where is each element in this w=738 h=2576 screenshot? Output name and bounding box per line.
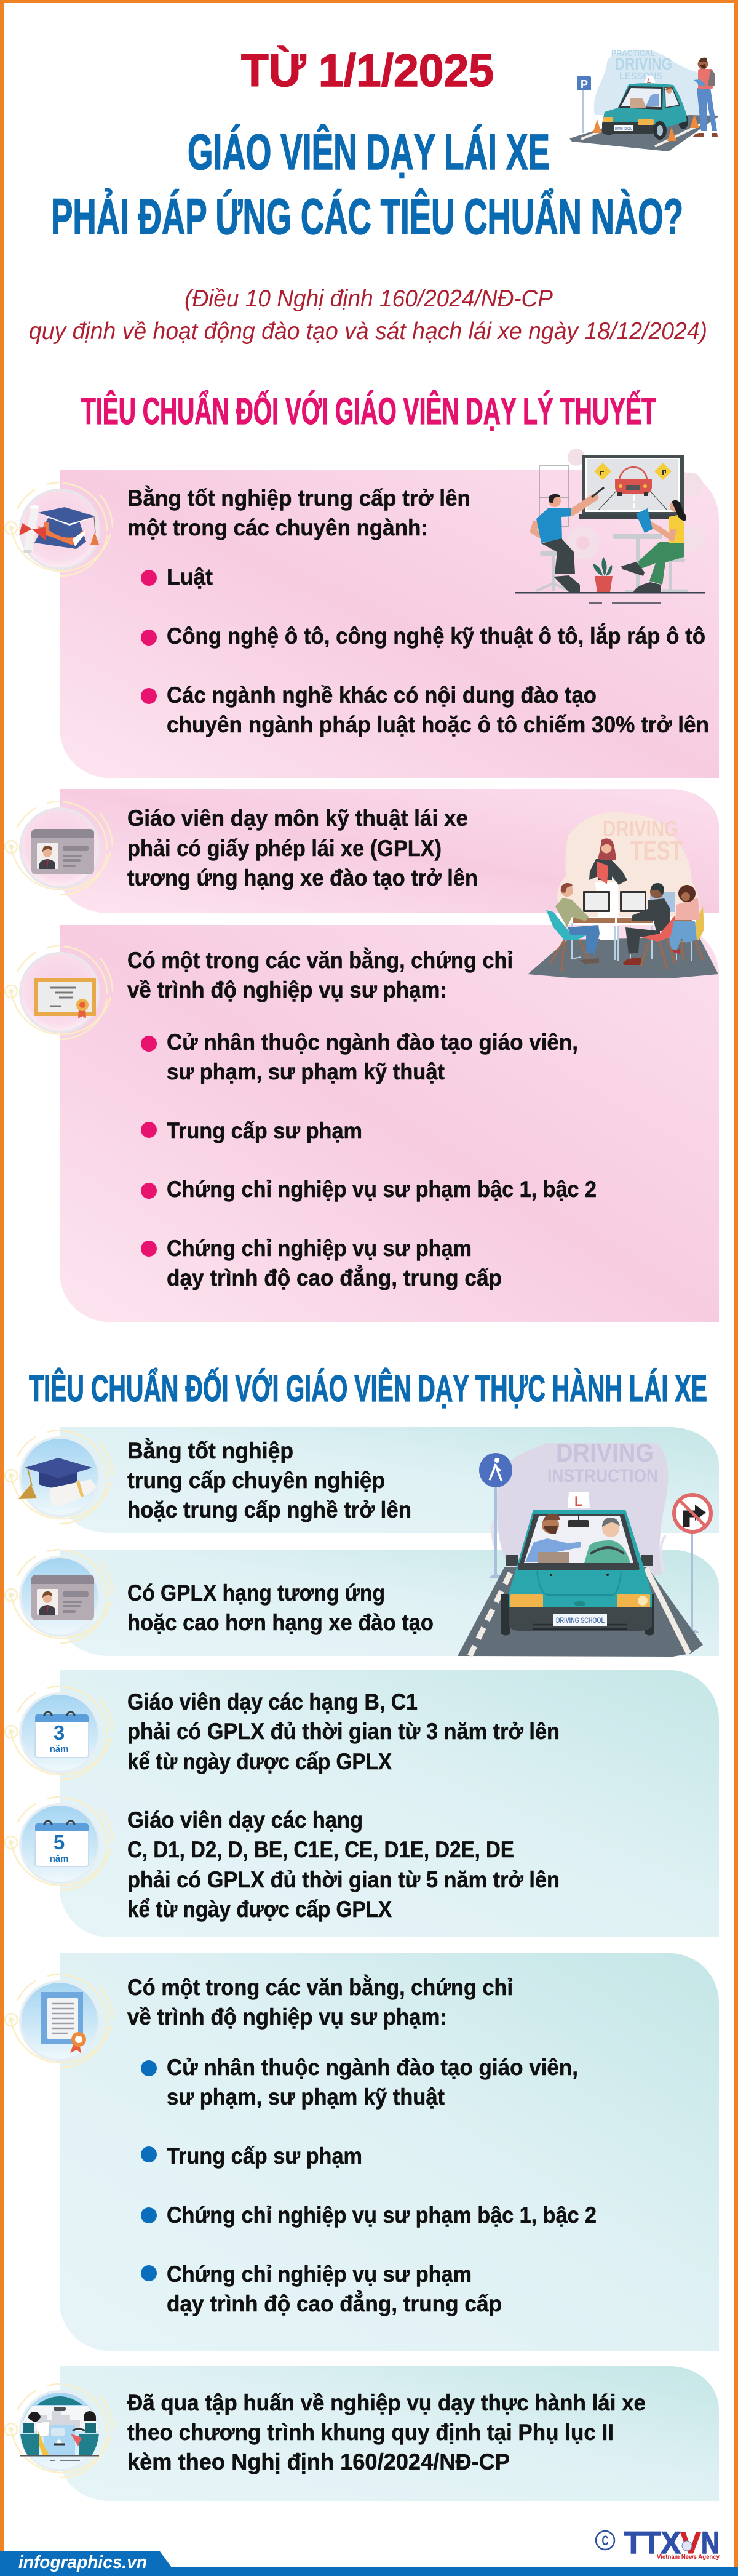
logo: TTXVN: N	[701, 2526, 720, 2560]
icon: calendar 3 years	[5, 1686, 113, 1780]
illustration: driving instruction car: DRIVING SCHOOL	[556, 1616, 605, 1625]
panel: pedagogy certificates (theory)	[5, 925, 719, 1322]
panel: practical degree	[5, 1427, 719, 1533]
illustration: driving instruction car: L	[574, 1494, 582, 1509]
text block: licence requirement: phải có giấy phép lái xe (GPLX)	[127, 836, 442, 861]
text block: certificate requirement	[127, 947, 513, 1002]
bullet list: certificates: Chứng chỉ nghiệp vụ sư phạm bậc 1, bậc 2	[167, 1177, 597, 1202]
text block: certificate requirement: Có một trong các văn bằng, chứng chỉ	[127, 1974, 513, 2000]
illustration: classroom	[515, 449, 705, 603]
panel: years holding licence	[5, 1670, 719, 1937]
icon: calendar 3 years: 3	[54, 1721, 65, 1744]
bullet list: certificates: dạy trình độ cao đẳng, trung cấp	[167, 2290, 502, 2316]
logo: TTXVN: Vietnam News Agency	[657, 2553, 720, 2561]
text block: degree requirement: một trong các chuyên ngành:	[127, 515, 428, 540]
logo: TTXVN	[596, 2526, 720, 2561]
illustration: driving instruction car: DRIVING	[556, 1438, 654, 1467]
bullet list: majors: Công nghệ ô tô, công nghệ kỹ thuật ô tô, lắp ráp ô tô	[167, 623, 705, 649]
text block: practical degree requirement: Bằng tốt nghiệp	[127, 1438, 293, 1463]
text block: training requirement	[127, 2390, 646, 2474]
bullet list: certificates: Cử nhân thuộc ngành đào tạo giáo viên,	[167, 2055, 578, 2080]
footer bar	[0, 2551, 738, 2576]
text block: licence requirement: Giáo viên dạy môn kỹ thuật lái xe	[127, 806, 468, 831]
icon: certificate	[5, 946, 113, 1039]
icon: licence card	[5, 801, 113, 895]
text block: certificate requirement	[127, 1974, 513, 2030]
text block: licence class	[127, 1580, 434, 1635]
bullet list: certificates: Chứng chỉ nghiệp vụ sư phạm	[167, 2262, 472, 2287]
text block: licence class: hoặc cao hơn hạng xe đào tạo	[127, 1610, 434, 1635]
bullet list: certificates: Chứng chỉ nghiệp vụ sư phạm	[167, 1236, 472, 1261]
text block: licence requirement: tương ứng hạng xe đào tạo trở lên	[127, 865, 478, 890]
bullet list: certificates: dạy trình độ cao đẳng, trung cấp	[167, 1265, 502, 1290]
panel: theory degree	[5, 449, 719, 778]
bullet list: majors: Các ngành nghề khác có nội dung đào tạo	[167, 682, 597, 708]
text block: certificate requirement: về trình độ nghiệp vụ sư phạm:	[127, 977, 447, 1002]
illustration: practical driving lessons: P	[581, 78, 588, 90]
text block: licence class: Có GPLX hạng tương ứng	[127, 1580, 385, 1606]
logo: TTXVN: V	[680, 2526, 702, 2560]
text block: degree requirement: Bằng tốt nghiệp trung cấp trở lên	[127, 485, 470, 511]
panel: driving licence for technique teachers	[5, 789, 719, 913]
legal basis subtitle	[29, 286, 707, 345]
panel: pedagogy certificates (practical)	[5, 1953, 719, 2351]
logo: TTXVN: TTX	[624, 2526, 681, 2560]
text block: degree requirement	[127, 485, 470, 540]
bullet list: certificates: sư phạm, sư phạm kỹ thuật	[167, 2084, 445, 2110]
illustration: practical driving lessons: L	[647, 78, 651, 85]
illustration: practical driving lessons: DRIVING	[615, 55, 672, 73]
main title: GIÁO VIÊN DẠY LÁI XE	[188, 124, 550, 180]
bullet list: majors	[141, 564, 709, 737]
illustration: driving instruction car	[458, 1438, 711, 1657]
text block: 5 years: kể từ ngày được cấp GPLX	[127, 1897, 392, 1922]
text block: 3 years: phải có GPLX đủ thời gian từ 3 năm trở lên	[127, 1719, 560, 1744]
text block: training requirement: kèm theo Nghị định 160/2024/NĐ-CP	[127, 2449, 510, 2474]
icon: licence card	[5, 1550, 113, 1643]
bullet list: certificates: Cử nhân thuộc ngành đào tạo giáo viên,	[167, 1030, 578, 1055]
icon: car interior	[5, 2384, 113, 2478]
bullet list: certificates	[141, 2055, 597, 2316]
illustration: practical driving lessons: LESSONS	[619, 70, 662, 82]
illustration: driving test	[528, 812, 718, 978]
footer site name: infographics.vn	[18, 2553, 147, 2572]
text block: 3 years	[127, 1689, 560, 1774]
text block: 5 years: Giáo viên dạy các hạng	[127, 1807, 363, 1833]
illustration: driving test: TEST	[630, 836, 683, 866]
text block: certificate requirement: về trình độ nghiệp vụ sư phạm:	[127, 2004, 447, 2030]
bullet list: certificates: sư phạm, sư phạm kỹ thuật	[167, 1059, 445, 1084]
bullet list: majors: chuyên ngành pháp luật hoặc ô tô chiếm 30% trở lên	[167, 712, 709, 737]
illustration: practical driving lessons: DRIVING SCHOOL	[615, 127, 632, 131]
text block: 5 years: phải có GPLX đủ thời gian từ 5 năm trở lên	[127, 1867, 560, 1892]
icon: calendar 5 years: 5	[54, 1831, 65, 1854]
panel: practical licence	[5, 1550, 719, 1656]
legal basis subtitle: quy định về hoạt động đào tạo và sát hạch lái xe ngày 18/12/2024)	[29, 318, 707, 345]
text block: 3 years: kể từ ngày được cấp GPLX	[127, 1749, 392, 1774]
text block: certificate requirement: Có một trong các văn bằng, chứng chỉ	[127, 947, 513, 973]
text block: 5 years	[127, 1807, 560, 1922]
text block: 3 years: Giáo viên dạy các hạng B, C1	[127, 1689, 418, 1714]
text block: training requirement: Đã qua tập huấn về nghiệp vụ dạy thực hành lái xe	[127, 2390, 646, 2415]
icon: document with seal	[5, 1974, 113, 2068]
icon: calendar 5 years	[5, 1797, 113, 1890]
icon: calendar 3 years: năm	[50, 1744, 68, 1754]
main title	[51, 124, 683, 245]
bullet list: certificates	[141, 1030, 597, 1290]
icon: calendar 5 years: năm	[50, 1854, 68, 1864]
logo: TTXVN: C	[601, 2533, 609, 2548]
icon: graduation cap	[5, 1430, 113, 1524]
illustration: practical driving lessons: PRACTICAL	[611, 48, 655, 58]
legal basis subtitle: (Điều 10 Nghị định 160/2024/NĐ-CP	[184, 286, 553, 312]
bullet list: certificates: Trung cấp sư phạm	[167, 2143, 362, 2169]
text block: practical degree requirement: trung cấp chuyên nghiệp	[127, 1468, 385, 1493]
panel: training course	[5, 2366, 719, 2501]
text block: training requirement: theo chương trình khung quy định tại Phụ lục II	[127, 2420, 614, 2445]
icon: diploma, cap and books	[5, 482, 113, 576]
text block: licence requirement	[127, 806, 478, 890]
text block: practical degree requirement	[127, 1438, 411, 1522]
text block: practical degree requirement: hoặc trung cấp nghề trở lên	[127, 1497, 411, 1522]
bullet list: certificates: Trung cấp sư phạm	[167, 1118, 362, 1143]
bullet list: certificates: Chứng chỉ nghiệp vụ sư phạm bậc 1, bậc 2	[167, 2202, 597, 2228]
title date: TỪ 1/1/2025	[241, 45, 494, 96]
text block: 5 years: C, D1, D2, D, BE, C1E, CE, D1E, D2E, DE	[127, 1837, 514, 1862]
bullet list: majors: Luật	[167, 564, 213, 590]
illustration: driving instruction car: INSTRUCTION	[547, 1466, 658, 1486]
illustration: driving test: DRIVING	[603, 816, 678, 841]
illustration: practical driving lessons	[569, 48, 720, 151]
